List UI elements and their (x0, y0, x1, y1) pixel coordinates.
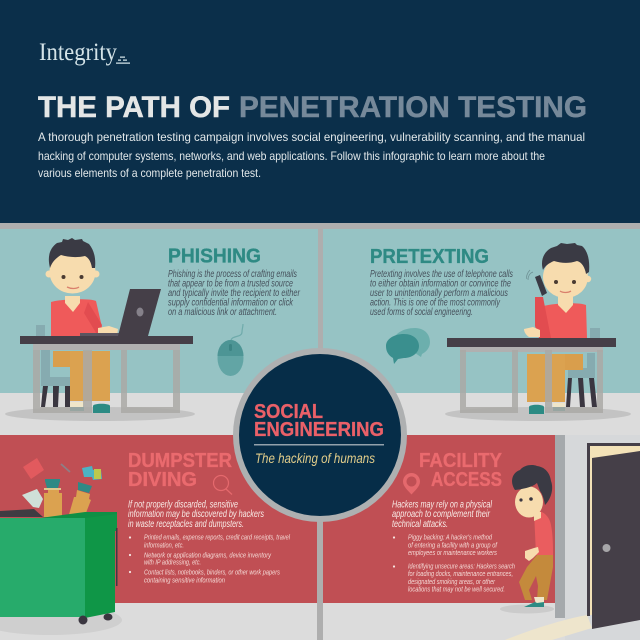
text: facility intro: technical attacks. (392, 519, 448, 530)
text: pretexting description: Pretexting involves the use of telephone calls (370, 269, 513, 280)
heading: pretexting: PRETEXTING (370, 246, 489, 268)
heading: facility access (419, 450, 503, 491)
title: THE PATH OF (38, 91, 230, 124)
sub-icon: flying papers (22, 458, 102, 508)
list: facility items: employees or maintenance workers (408, 548, 497, 557)
logo: Integrity: Integrity (39, 39, 117, 66)
illustration: person at laptop (5, 238, 195, 421)
list: dumpster items: containing sensitive information (144, 576, 225, 584)
heading: facility access: FACILITY (419, 450, 503, 472)
text: dumpster intro: If not properly discarded, sensitive (128, 500, 238, 510)
text: pretexting description: used forms of social engineering. (370, 307, 473, 318)
list: dumpster items: Contact lists, notebooks, binders, or other work papers (144, 568, 280, 576)
list: facility items: of entering a facility with a group of (408, 540, 498, 550)
illustration: dumpster (0, 458, 122, 635)
text: dumpster intro: in waste receptacles and dumpsters. (128, 519, 244, 530)
text: facility intro: Hackers may rely on a physical (392, 500, 492, 510)
heading: phishing: PHISHING (168, 246, 261, 268)
list: dumpster items: with IP addressing, etc. (144, 558, 201, 566)
background floor and wall (0, 223, 640, 640)
list: facility items: Identifying unsecure areas: Hackers search (408, 562, 515, 570)
heading: facility access: ACCESS (431, 469, 502, 491)
text: dumpster intro (128, 500, 264, 530)
icon: map pin (403, 473, 420, 494)
text: dumpster intro: information may be discovered by hackers (128, 509, 264, 520)
list: dumpster items (129, 532, 290, 584)
header panel (0, 0, 640, 223)
text: phishing description: that appear to be from a trusted source (168, 278, 293, 290)
panel: facility access (323, 435, 565, 618)
intro text (38, 130, 585, 180)
intro text: hacking of computer systems, networks, and web applications. Follow this infographic to learn more about the (38, 149, 545, 163)
text: pretexting description: user to unintentionally perform a malicious (370, 288, 508, 299)
text: facility intro (392, 500, 492, 530)
icon: magnifier (214, 476, 232, 494)
list: facility items (393, 532, 515, 594)
list: facility items: for loading docks, maintenance entrances, (408, 569, 513, 578)
illustration: sneaking person (500, 465, 554, 614)
circle heading: ENGINEERING (254, 419, 384, 441)
intro text: various elements of a complete penetration test. (38, 166, 261, 180)
list: dumpster items: Network or application diagrams, device inventory (144, 550, 271, 560)
central circle: social engineering (233, 348, 407, 522)
circle heading: SOCIAL (254, 401, 323, 423)
illustration: person on phone (445, 243, 631, 421)
list: facility items: designated smoking areas, or other (408, 577, 495, 586)
list: dumpster items: information, etc. (144, 540, 184, 550)
list: facility items: locations that may not be well secured. (408, 584, 505, 594)
circle heading (254, 401, 384, 441)
intro text: A thorough penetration testing campaign involves social engineering, vulnerability scanning, and the manual (38, 130, 585, 144)
text: pretexting description: to either obtain information or convince the (370, 278, 511, 290)
panel: phishing (0, 229, 318, 421)
text: phishing description: Phishing is the process of crafting emails (168, 269, 297, 280)
heading: dumpster diving: DUMPSTER (128, 450, 233, 472)
circle subtitle: The hacking of humans (255, 451, 375, 466)
list: facility items: Piggy backing: A hacker's method (408, 532, 493, 542)
column (555, 435, 565, 618)
panel: pretexting (323, 229, 640, 421)
illustration: open door (505, 443, 640, 640)
text: phishing description: and typically invite the recipient to either (168, 288, 301, 299)
heading: dumpster diving (128, 450, 233, 491)
title: PENETRATION TESTING (239, 91, 587, 124)
icon: speech bubbles (386, 328, 430, 364)
text: phishing description (168, 269, 301, 318)
icon: mouse (218, 324, 244, 376)
list: dumpster items: Printed emails, expense reports, credit card receipts, travel (144, 532, 290, 542)
panel: dumpster diving (0, 435, 317, 635)
text: facility intro: approach to complement their (392, 509, 490, 520)
text: pretexting description (370, 269, 513, 318)
heading: dumpster diving: DIVING (128, 469, 197, 491)
sub-icon: boxes in dumpster (44, 479, 92, 518)
text: pretexting description: action. This is one of the most commonly (370, 298, 501, 308)
text: phishing description: on a malicious link or attachment. (168, 307, 277, 318)
text: phishing description: supply confidential information or click (168, 298, 294, 308)
